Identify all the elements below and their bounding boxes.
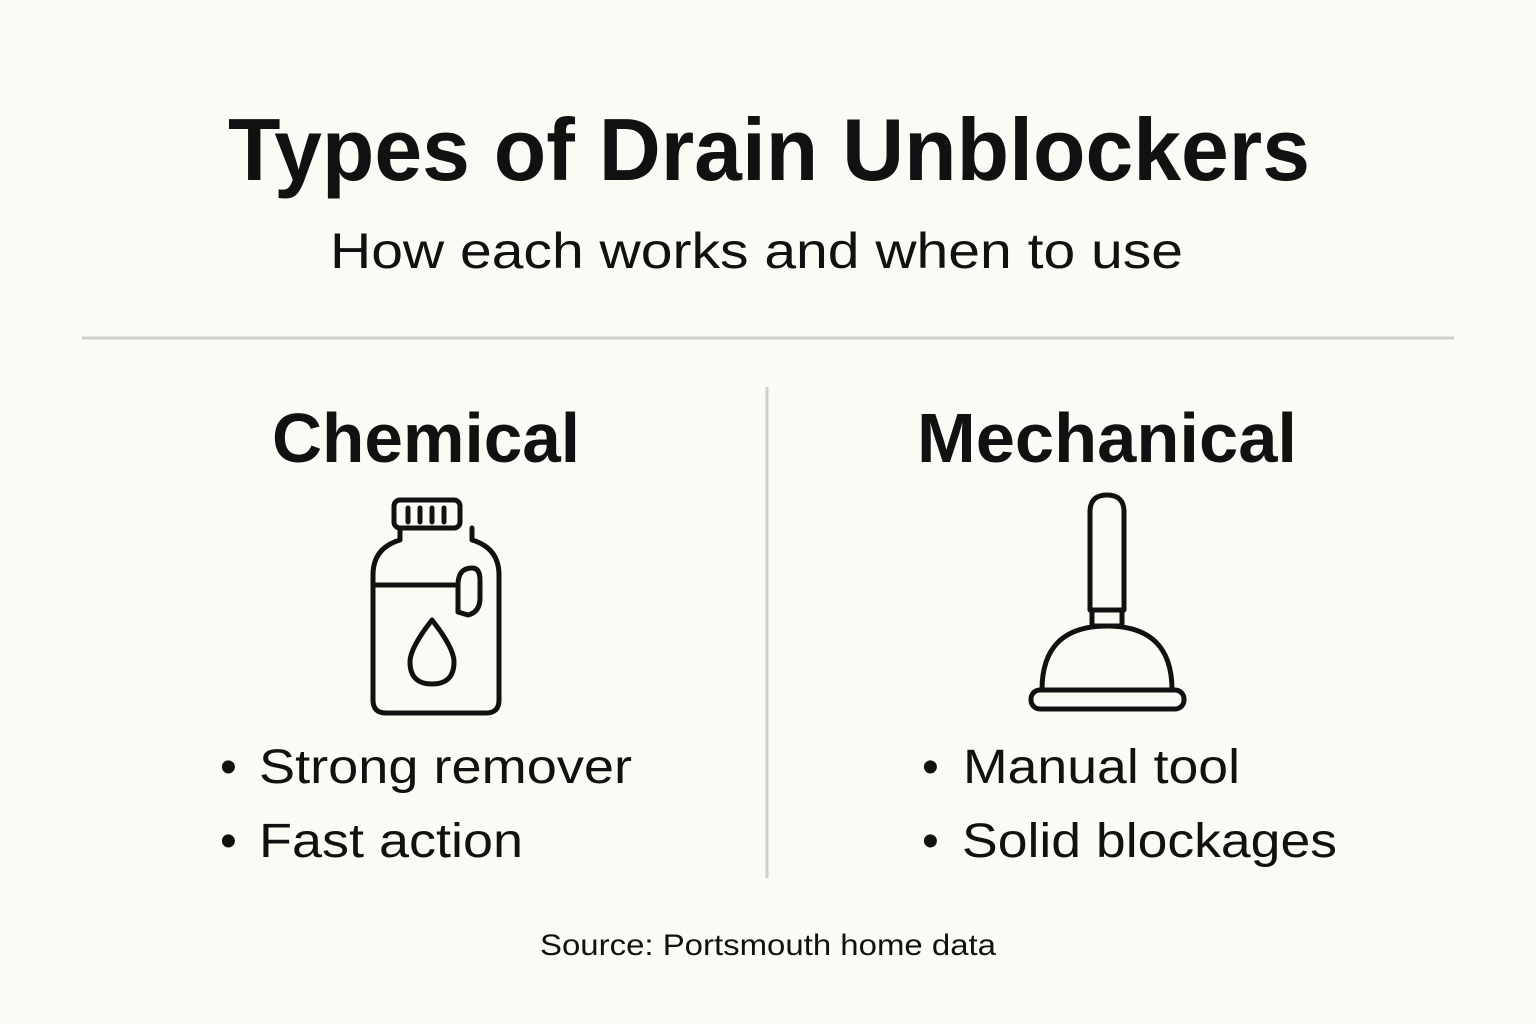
panel: mechanical: [917, 399, 1337, 868]
subtitle: How each works and when to use: [330, 223, 1183, 279]
title: Types of Drain Unblockers: [228, 100, 1310, 199]
heading: Mechanical: Mechanical: [917, 399, 1297, 477]
heading: Chemical: Chemical: [272, 399, 580, 477]
bullets: chemical: •: [220, 815, 237, 868]
bullets: chemical: [220, 741, 632, 868]
icon: plunger: [1031, 495, 1184, 709]
bullets: mechanical: •: [922, 741, 939, 794]
bullets: chemical: Strong remover: [259, 741, 632, 794]
bullets: mechanical: Manual tool: [963, 741, 1240, 794]
panel: chemical: [220, 399, 632, 868]
source note: Source: Portsmouth home data: [540, 929, 996, 962]
bullets: chemical: •: [220, 741, 237, 794]
bullets: mechanical: •: [922, 815, 939, 868]
bullets: mechanical: Solid blockages: [962, 815, 1337, 868]
icon: bottle: [373, 500, 499, 713]
bullets: chemical: Fast action: [259, 815, 523, 868]
bullets: mechanical: [922, 741, 1337, 868]
